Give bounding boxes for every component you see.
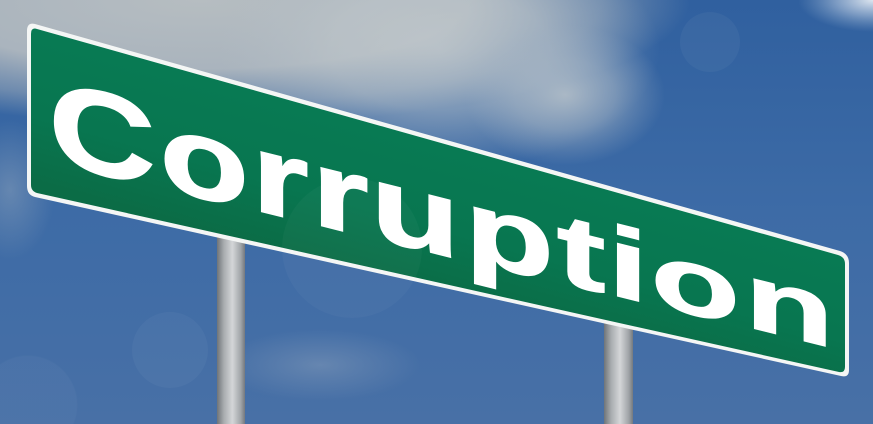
sign word: r <box>312 125 368 261</box>
sign word: o <box>651 220 740 346</box>
sign word: n <box>745 242 834 369</box>
sign word: p <box>465 167 554 304</box>
sign word: i <box>608 204 648 325</box>
sign border <box>27 24 849 376</box>
left pole <box>217 230 245 424</box>
sign word: t <box>557 190 605 316</box>
sign face <box>31 29 845 372</box>
sign word: C <box>49 55 155 213</box>
sign word: o <box>160 86 249 234</box>
green sign <box>27 24 849 376</box>
sign word: r <box>252 108 308 248</box>
flare on sign <box>282 178 422 318</box>
right pole <box>604 320 633 424</box>
sign word: u <box>371 141 460 283</box>
